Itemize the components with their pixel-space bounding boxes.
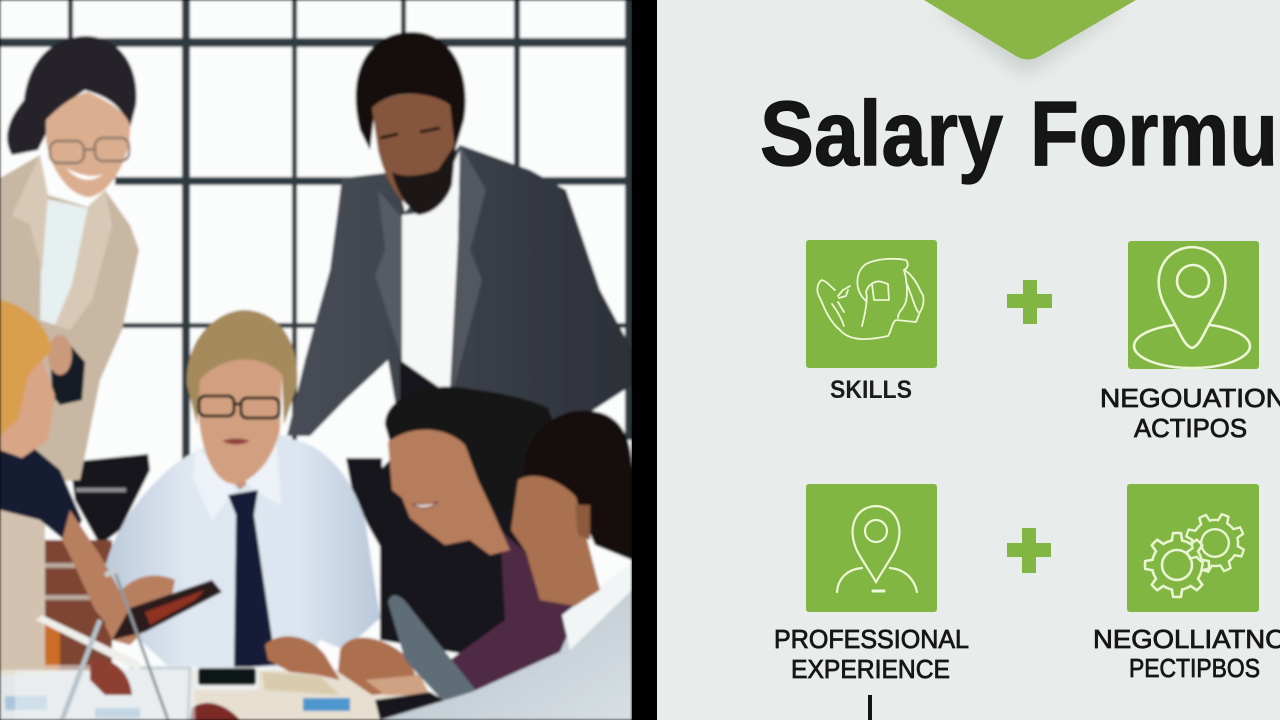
label: professional experience: EXPERIENCE <box>791 654 950 684</box>
connector line <box>868 695 872 720</box>
tablet and glass laptop edges <box>36 570 168 720</box>
title <box>760 83 1278 185</box>
window frame <box>0 0 632 470</box>
label: professional experience: PROFESSIONAL <box>774 624 969 654</box>
black divider band <box>632 0 657 720</box>
person: standing man in charcoal suit <box>287 32 632 660</box>
table items: smartphone, paper, glass and blue card <box>0 665 350 720</box>
label: negotiation perceptions <box>1093 624 1280 683</box>
label: negotiation perceptions: NEGOLLIATNC <box>1093 624 1280 654</box>
label: negotiation perceptions: PECTIPBOS <box>1129 653 1260 683</box>
dark device and laptop lid <box>375 595 482 720</box>
person: foreground man in grey jacket <box>380 411 632 720</box>
formula item: skills <box>806 240 937 404</box>
hands in the centre of the table <box>265 636 430 695</box>
person: blonde woman at left edge <box>0 300 132 695</box>
green chevron badge <box>924 0 1136 74</box>
lower room: chairs and wood cabinet <box>28 454 382 672</box>
table <box>0 670 420 720</box>
label: professional experience <box>774 624 969 684</box>
label: negotiation actions: NEGOUATION <box>1100 383 1280 413</box>
plus sign <box>1007 280 1052 324</box>
person: woman with dark hair in plum top <box>385 387 585 692</box>
label: skills: SKILLS <box>830 376 912 404</box>
icon: pin with shoulders <box>837 506 917 592</box>
hand holding smartphone <box>105 576 222 645</box>
plus sign <box>1007 528 1051 573</box>
label: negotiation actions <box>1100 383 1280 443</box>
icon: map pin on ellipse <box>1134 247 1250 368</box>
title: Salary <box>760 83 1003 185</box>
formula item: professional experience <box>774 484 969 684</box>
icon: head sketch <box>817 259 924 339</box>
photo panel: business team meeting around a table <box>0 0 632 720</box>
panel: salary formula <box>657 0 1280 720</box>
person: seated woman with tie <box>105 310 380 668</box>
icon: gears <box>1145 505 1253 597</box>
formula item: negotiation actions <box>1100 241 1280 443</box>
label: negotiation actions: ACTIPOS <box>1134 413 1247 443</box>
person: woman in beige blazer <box>0 36 139 670</box>
formula item: negotiation perceptions <box>1093 484 1280 683</box>
